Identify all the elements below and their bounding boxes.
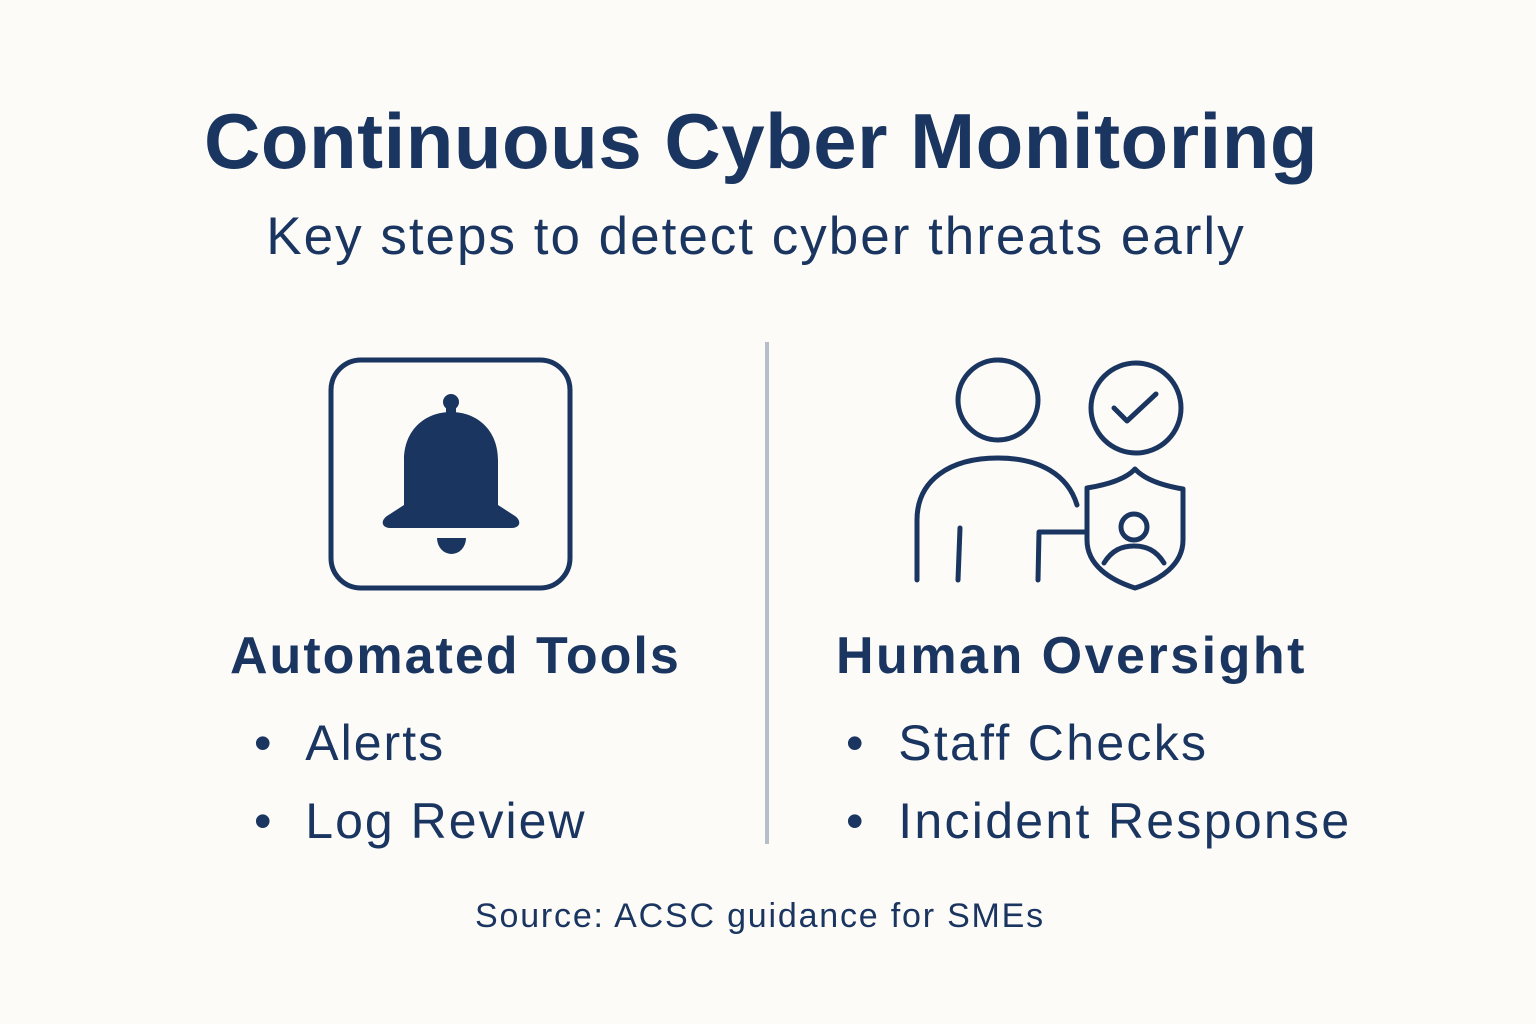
- icon: bell in rounded square: [328, 358, 572, 590]
- heading: automated tools: Automated Tools: [230, 627, 681, 685]
- bullet list: • Alerts: [254, 715, 445, 771]
- source note: Source: ACSC guidance for SMEs: [475, 897, 1045, 935]
- icon: person with check and shield: [914, 358, 1186, 590]
- bullet list: [254, 715, 587, 849]
- title: Continuous Cyber Monitoring: [204, 97, 1318, 185]
- panel: automated tools: [230, 358, 681, 849]
- divider: [765, 342, 769, 844]
- subtitle: Key steps to detect cyber threats early: [266, 207, 1246, 266]
- bullet list: [846, 715, 1351, 849]
- bullet list: • Log Review: [254, 793, 587, 849]
- bullet list: • Staff Checks: [846, 715, 1208, 771]
- panel: human oversight: [836, 358, 1351, 849]
- heading: human oversight: Human Oversight: [836, 627, 1307, 685]
- bullet list: • Incident Response: [846, 793, 1351, 849]
